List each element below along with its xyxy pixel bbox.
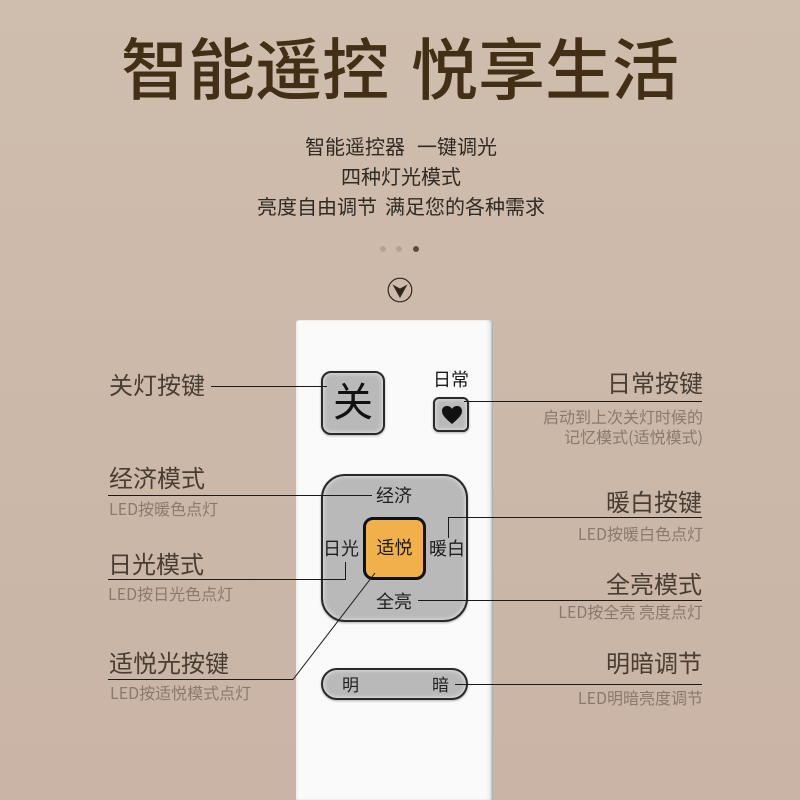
daily label: 日常: [433, 370, 469, 390]
description: daylight mode: LED按日光色点灯: [108, 581, 233, 605]
label: full brightness mode: 全亮模式: [606, 572, 702, 599]
description: economy mode: LED按暖色点灯: [109, 496, 218, 520]
warm white key label: 暖白: [429, 539, 465, 559]
economy key label: 经济: [376, 486, 412, 506]
label: economy mode: 经济模式: [109, 466, 205, 493]
intro text: 四种灯光模式: [341, 167, 461, 189]
intro text: [257, 137, 545, 219]
label: daylight mode: 日光模式: [108, 552, 204, 579]
mode keypad: [321, 474, 468, 622]
dim label: 暗: [432, 676, 449, 695]
off button: [321, 371, 385, 435]
description: full brightness mode: LED按全亮 亮度点灯: [558, 599, 703, 623]
comfort key: 适悦: [376, 538, 412, 558]
description: warm white key: LED按暖白色点灯: [578, 521, 703, 545]
description: daily key: 启动到上次关灯时候的: [543, 404, 703, 428]
description: daily key: [543, 404, 703, 448]
daily heart button: [433, 397, 469, 432]
intro text: 智能遥控器 一键调光: [305, 137, 497, 159]
icon: down arrow: [388, 278, 412, 302]
label: off key: 关灯按键: [109, 373, 205, 400]
daylight key label: 日光: [323, 539, 359, 559]
bright label: 明: [342, 676, 359, 695]
comfort key: [363, 517, 426, 580]
label: warm white key: 暖白按键: [606, 490, 702, 517]
label: comfort key: 适悦光按键: [109, 651, 229, 678]
off button: 关: [333, 381, 373, 425]
label: brightness adjustment: 明暗调节: [606, 651, 702, 678]
description: brightness adjustment: LED明暗亮度调节: [578, 685, 703, 709]
description: comfort key: LED按适悦模式点灯: [110, 680, 251, 704]
description: daily key: 记忆模式(适悦模式): [564, 424, 703, 448]
title: 智能遥控 悦享生活: [121, 34, 679, 109]
intro text: 亮度自由调节 满足您的各种需求: [257, 197, 545, 219]
brightness key: [321, 668, 468, 700]
label: daily key: 日常按键: [607, 371, 703, 398]
full brightness key label: 全亮: [376, 592, 412, 612]
panel: remote control: [296, 320, 493, 800]
page dots: [380, 246, 419, 252]
